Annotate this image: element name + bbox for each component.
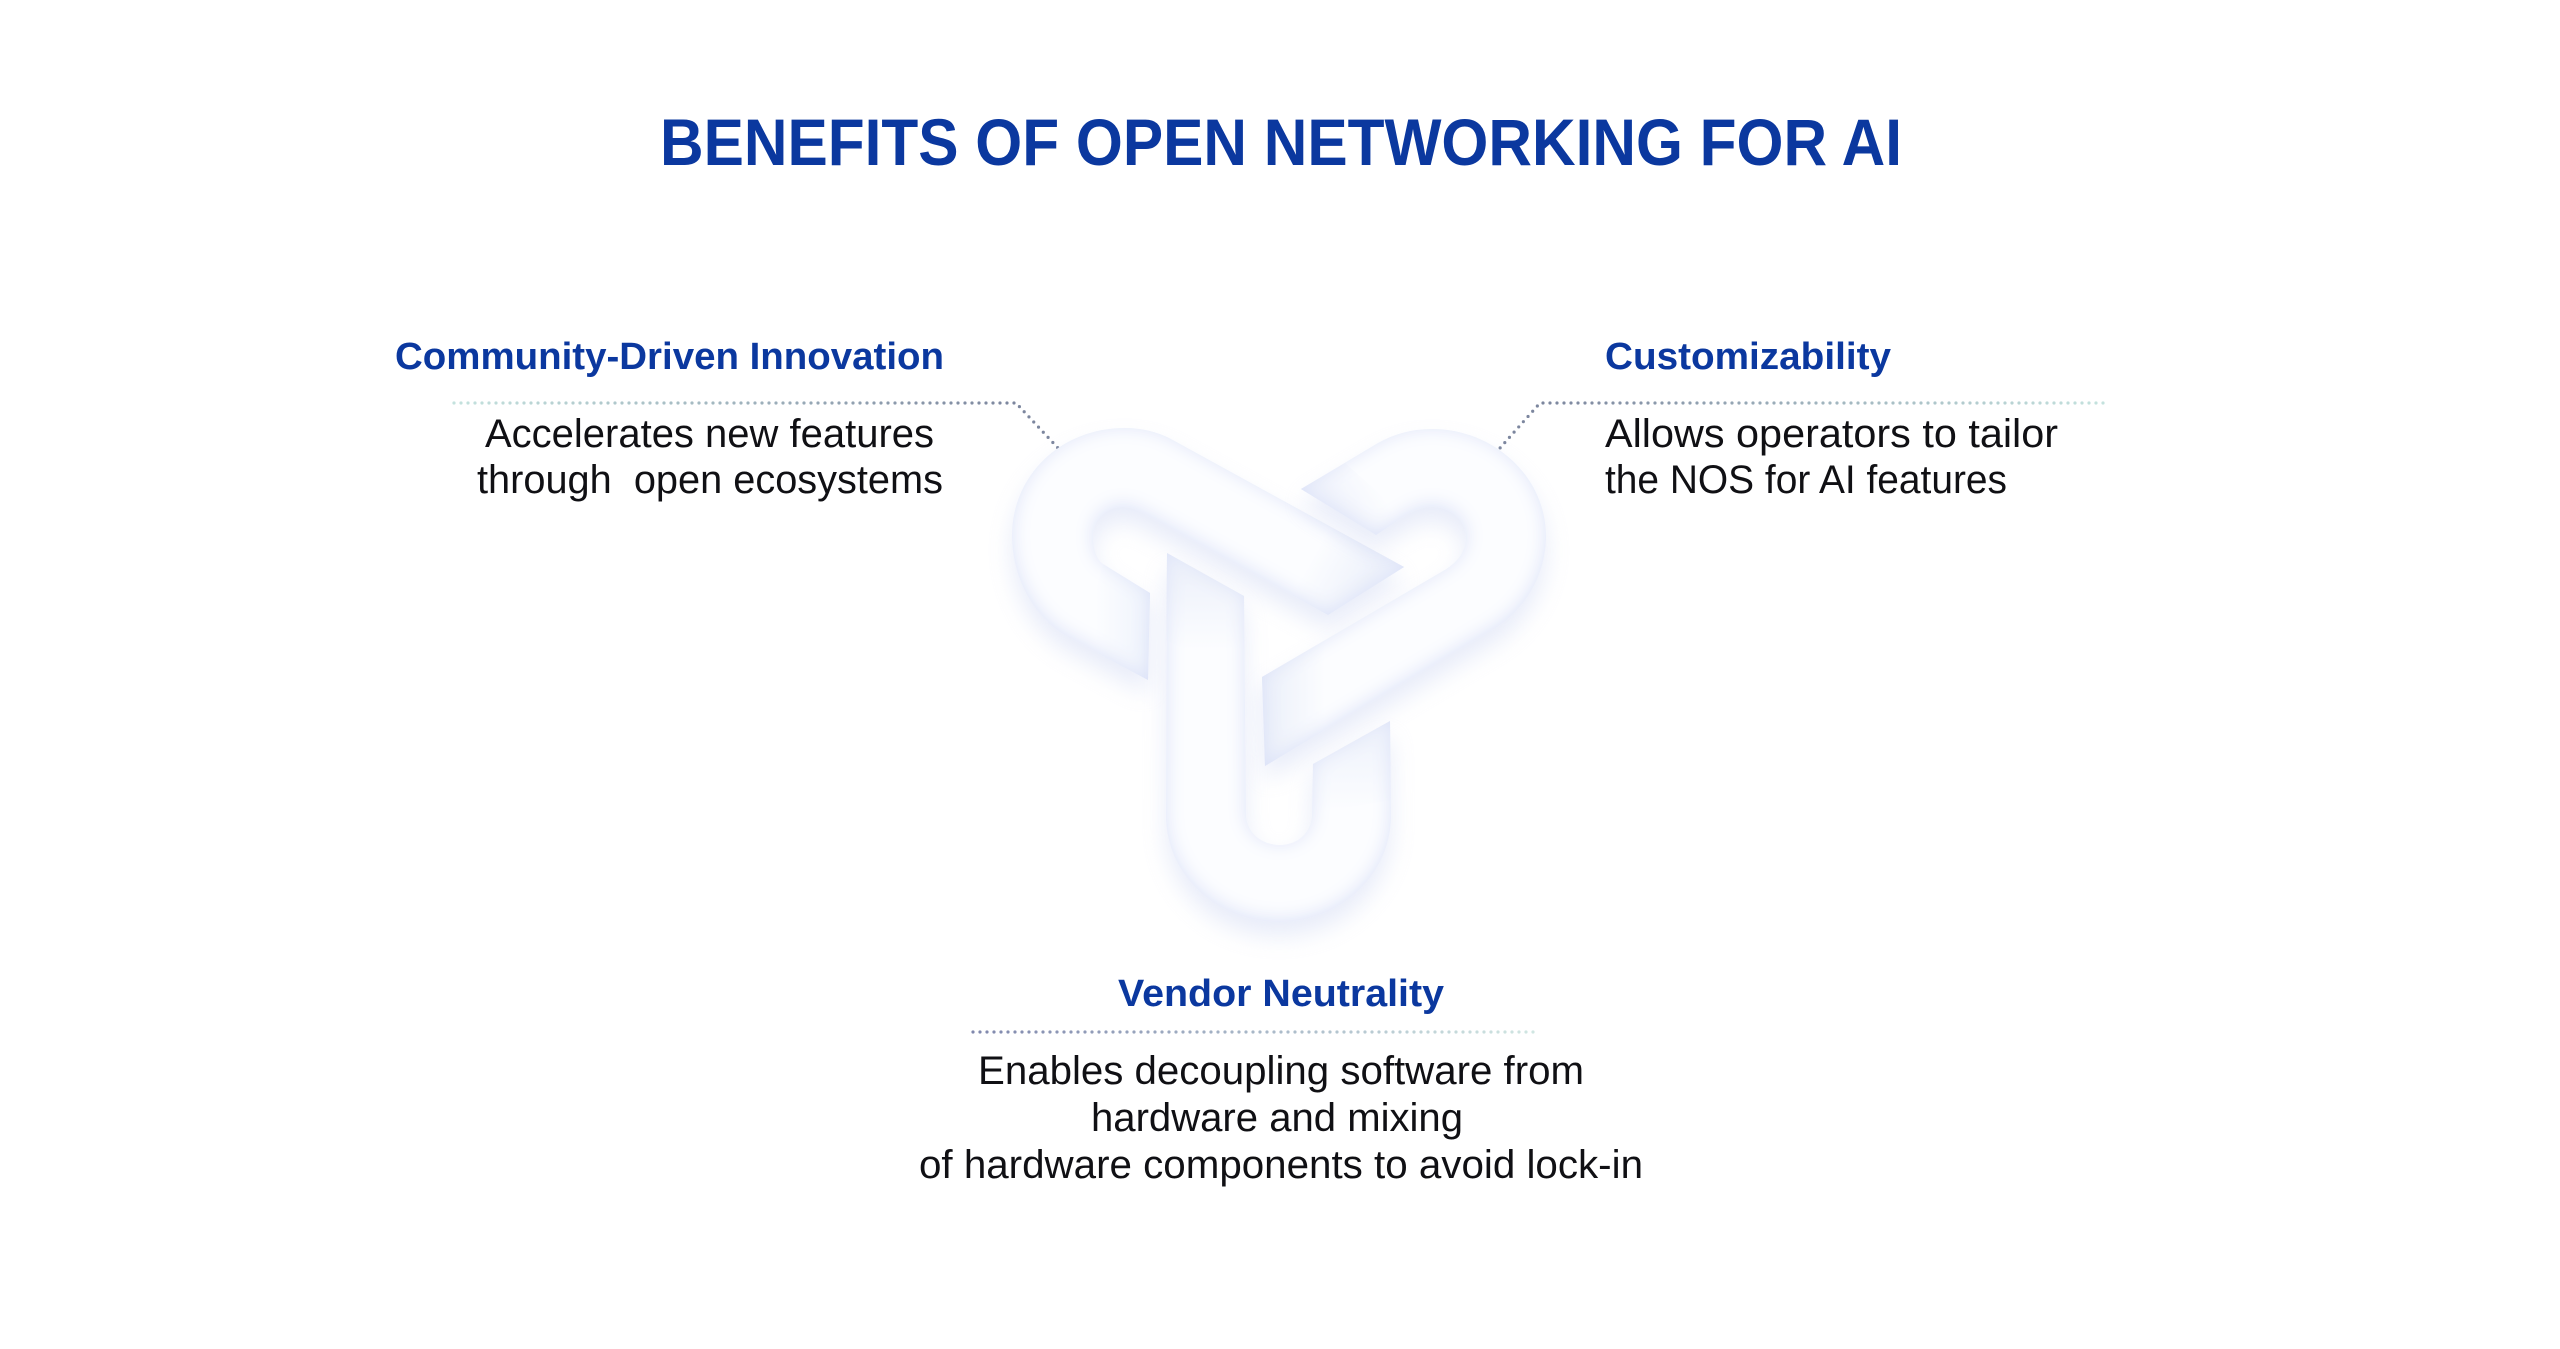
description: line 1: Accelerates new features [485,412,934,456]
text block: Vendor Neutrality [919,973,1643,1187]
heading: Customizability: Customizability [1605,336,1891,378]
heading: Vendor Neutrality: Vendor Neutrality [1118,973,1444,1015]
text block: Community-Driven Innovation [395,336,944,502]
text block: Customizability [1605,336,2058,502]
icon: interlocked three-part knot [1012,428,1546,922]
heading: Community-Driven Innovation: Community-Driven Innovation [395,336,944,378]
knot link: top right [1262,429,1546,766]
description: line 1: Enables decoupling software from [978,1049,1584,1093]
connector: left dotted leader [454,403,1058,448]
title: BENEFITS OF OPEN NETWORKING FOR AI [660,105,1902,179]
description: line 1: Allows operators to tailor [1605,412,2058,456]
connector: right dotted leader [1500,403,2103,448]
description: line 3: of hardware components to avoid lock-in [919,1143,1643,1187]
knot link: top left [1012,428,1404,680]
knot link: bottom [1166,553,1391,922]
description: line 2: hardware and mixing [1091,1096,1463,1140]
description: line 2: the NOS for AI features [1605,458,2007,502]
description: line 2: through open ecosystems [477,458,943,502]
connector: bottom dotted divider [973,1030,1535,1034]
